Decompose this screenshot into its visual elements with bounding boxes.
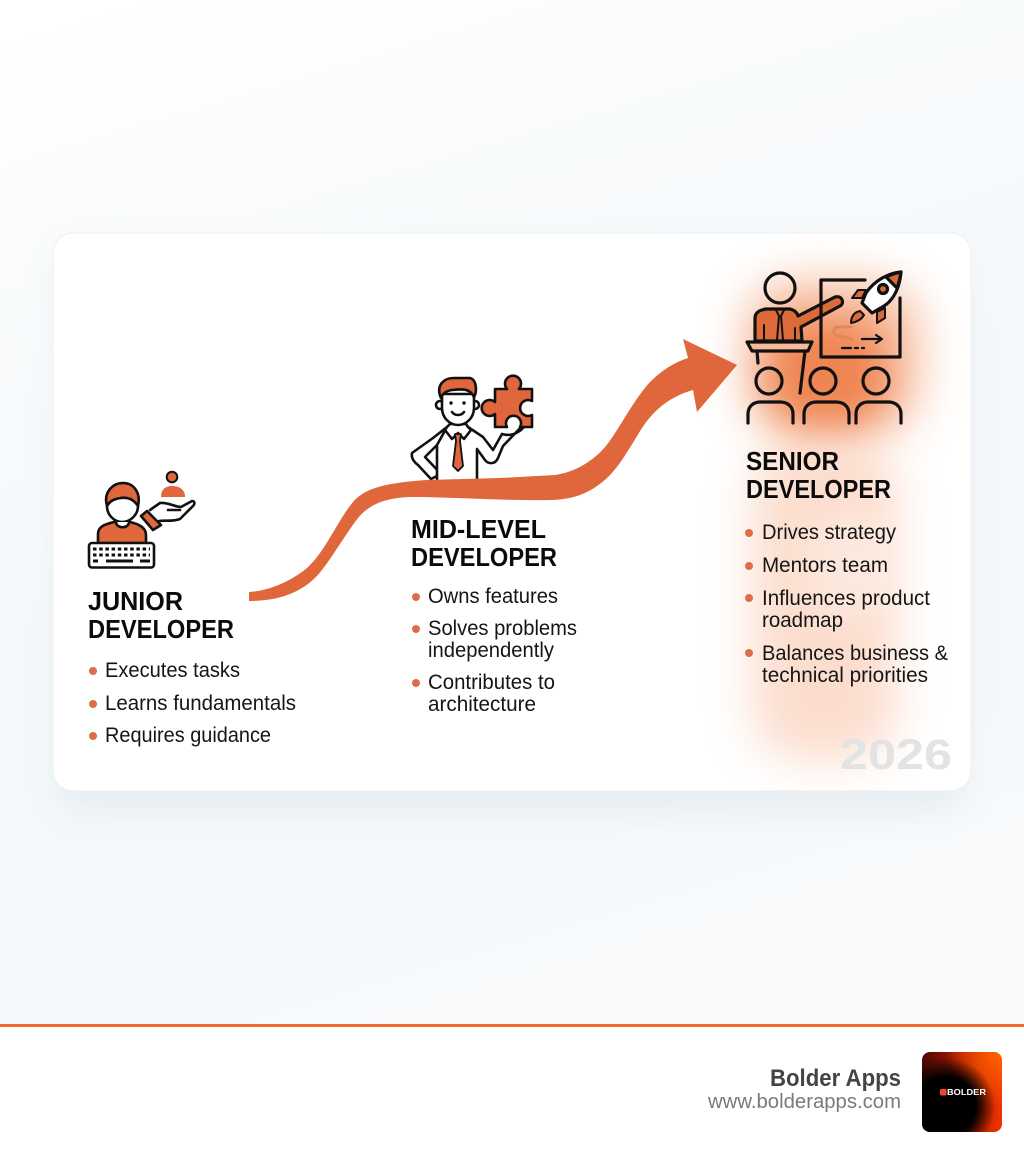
bullet list: senior developer: Mentors team <box>762 554 888 577</box>
bullet list: senior developer: technical priorities <box>762 664 928 687</box>
brand logo: BOLDER <box>947 1088 986 1097</box>
column: junior developer <box>88 586 296 747</box>
column: mid-level developer <box>411 514 577 716</box>
bullet list: mid-level developer: independently <box>428 639 554 662</box>
footer band <box>0 1024 1024 1154</box>
bullet list: senior developer: roadmap <box>762 609 843 632</box>
bullet list: senior developer: Influences product <box>762 587 930 610</box>
bullet list: junior developer: Executes tasks <box>105 659 240 682</box>
heading: junior developer: DEVELOPER <box>88 614 234 644</box>
brand name: Bolder Apps <box>770 1065 901 1092</box>
card panel <box>53 233 971 810</box>
heading: mid-level developer: MID-LEVEL <box>411 514 546 544</box>
heading: senior developer: SENIOR <box>746 446 839 476</box>
column: senior developer <box>745 446 948 687</box>
bullet list: junior developer: Learns fundamentals <box>105 692 296 715</box>
bullet list: senior developer: Drives strategy <box>762 521 896 544</box>
bullet list: mid-level developer: Owns features <box>428 585 558 608</box>
bullet list: junior developer: Requires guidance <box>105 724 271 747</box>
heading: junior developer <box>88 586 234 644</box>
senior column glow <box>745 280 920 760</box>
icon: mid-level developer with puzzle piece <box>412 376 532 482</box>
growth arrow <box>249 339 737 601</box>
brand logo <box>922 1052 1002 1132</box>
icon: junior developer at keyboard with helping hand <box>89 472 194 568</box>
heading: mid-level developer <box>411 514 557 572</box>
bullet list: junior developer <box>89 659 296 747</box>
bullet list: mid-level developer <box>412 585 577 716</box>
heading: junior developer: JUNIOR <box>88 586 183 616</box>
bullet list: senior developer <box>745 521 948 687</box>
icon: senior developer presenting to team <box>747 272 901 423</box>
year watermark: 2026 <box>840 731 952 779</box>
heading: senior developer <box>746 446 891 504</box>
heading: senior developer: DEVELOPER <box>746 474 891 504</box>
brand url: www.bolderapps.com <box>707 1091 901 1113</box>
bullet list: mid-level developer: architecture <box>428 693 536 716</box>
bullet list: senior developer: Balances business & <box>762 642 948 665</box>
bullet list: mid-level developer: Solves problems <box>428 617 577 640</box>
bullet list: mid-level developer: Contributes to <box>428 671 555 694</box>
heading: mid-level developer: DEVELOPER <box>411 542 557 572</box>
